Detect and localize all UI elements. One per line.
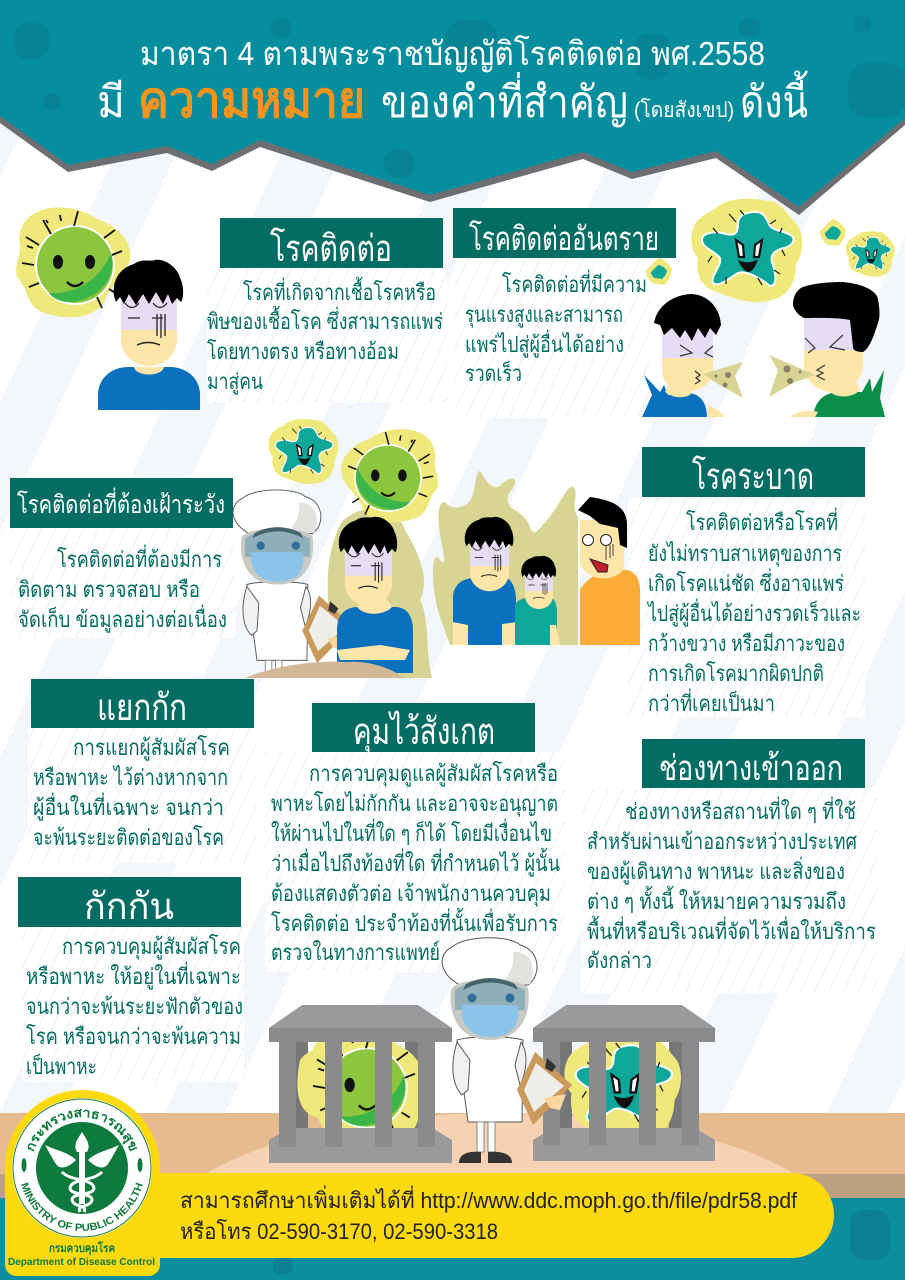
panel: กักกัน: หรือพาหะ ให้อยู่ในที่เฉพาะ [26, 961, 241, 990]
logo: Ministry of Public Health: กระทรวงสาธารณสุข [28, 1108, 138, 1152]
icon: green virus top left [16, 207, 130, 317]
panel: กักกัน: เป็นพาหะ [26, 1052, 97, 1079]
panel: โรคระบาด: ไปสู่ผู้อื่นได้อย่างรวดเร็วและ [646, 598, 861, 627]
panel: ช่องทางเข้าออก [582, 739, 877, 993]
panel: กักกัน: จนกว่าจะพ้นระยะฟักตัวของ [26, 994, 243, 1019]
icon: sad person in blue shirt [98, 260, 200, 410]
panel: โรคระบาด: โรคติดต่อหรือโรคที่ [686, 507, 838, 535]
panel: โรคติดต่อที่ต้องเฝ้าระวัง: จัดเก็บ ข้อมูลอย่างต่อเนื่อง [18, 604, 227, 633]
panel: โรคระบาด: เกิดโรคแน่ชัด ซึ่งอาจแพร่ [648, 568, 844, 596]
header banner [0, 0, 905, 215]
panel: กักกัน [18, 877, 244, 1082]
panel: คุมไว้สังเกต: ว่าเมื่อไปถึงท้องที่ใด ที่กำหนดไว้ ผู้นั้น [271, 848, 560, 877]
icon: sneezing person right [769, 282, 885, 417]
panel: โรคระบาด: การเกิดโรคมากผิดปกติ [648, 661, 824, 686]
panel: โรคติดต่ออันตราย: รุนแรงสูงและสามารถ [465, 302, 623, 328]
panel: คุมไว้สังเกต: พาหะโดยไม่กักกัน และอาจจะอนุญาต [271, 791, 558, 817]
panel: ช่องทางเข้าออก: ดังกล่าว [587, 948, 652, 973]
panel: โรคติดต่ออันตราย [453, 208, 676, 418]
icon: sick group with fumes [433, 471, 640, 645]
panel: โรคระบาด: โรคระบาด [692, 455, 814, 497]
contact bar: สามารถศึกษาเพิ่มเติมได้ที่ http://www.ddc.moph.go.th/file/pdr58.pdf [180, 1185, 798, 1213]
title: ของคำที่สำคัญ [381, 71, 628, 127]
panel: โรคระบาด [628, 447, 865, 717]
panel: โรคติดต่อที่ต้องเฝ้าระวัง [10, 478, 235, 638]
logo: Ministry of Public Health: MINISTRY OF PUBLIC HEALTH [21, 1182, 143, 1231]
panel: คุมไว้สังเกต: ตรวจในทางการแพทย์ [271, 940, 440, 965]
contact bar [120, 1173, 834, 1258]
icon: patient aura [328, 509, 432, 678]
icon: right cage with teal virus [533, 1005, 715, 1161]
icon: teal virus above patient [268, 419, 338, 484]
panel: ช่องทางเข้าออก: ช่องทางหรือสถานที่ใด ๆ ที่ใช้ [625, 796, 856, 824]
panel: โรคติดต่ออันตราย: โรคติดต่ออันตราย [469, 220, 659, 257]
logo: Ministry of Public Health: Department of Disease Control [8, 1256, 155, 1268]
title: มาตรา 4 ตามพระราชบัญญัติโรคติดต่อ พศ.2558 [140, 35, 765, 72]
icon: doctor between cages [442, 938, 572, 1163]
logo: Ministry of Public Health [5, 1090, 160, 1276]
icon: patient in bed [245, 517, 413, 678]
panel: แยกกัก: หรือพาหะ ไว้ต่างหากจาก [33, 765, 228, 790]
title: ดังนี้ [740, 70, 808, 127]
panel: กักกัน: กักกัน [84, 886, 174, 927]
logo: Ministry of Public Health: กรมควบคุมโรค [49, 1240, 115, 1256]
icon: green virus above patient [341, 429, 438, 522]
panel: โรคติดต่ออันตราย: แพร่ไปสู่ผู้อื่นได้อย่าง [465, 329, 624, 358]
icon: small blob top [820, 219, 846, 246]
icon: small teal virus right [846, 231, 895, 277]
panel: แยกกัก: ผู้อื่นในที่เฉพาะ จนกว่า [33, 792, 224, 821]
panel: โรคติดต่อ: มาสู่คน [207, 369, 263, 395]
icon: sneezing person left [642, 294, 743, 417]
panel: โรคติดต่อ: พิษของเชื้อโรค ซึ่งสามารถแพร่ [207, 306, 443, 334]
panel: คุมไว้สังเกต: ให้ผ่านไปในที่ใด ๆ ก็ได้ โดยมีเงื่อนไข [271, 818, 552, 846]
panel: แยกกัก: จะพ้นระยะติดต่อของโรค [33, 825, 224, 850]
title: ความหมาย [138, 72, 365, 128]
panel: โรคติดต่อ [207, 218, 447, 403]
panel: ช่องทางเข้าออก: ต่าง ๆ ทั้งนี้ ให้หมายความรวมถึง [587, 886, 846, 914]
panel: คุมไว้สังเกต [265, 703, 565, 972]
panel: คุมไว้สังเกต: การควบคุมดูแลผู้สัมผัสโรคหรือ [309, 761, 558, 787]
panel: คุมไว้สังเกต: โรคติดต่อ ประจำท้องที่นั้นเพื่อรับการ [271, 908, 558, 936]
panel: ช่องทางเข้าออก: ของผู้เดินทาง พาหนะ และสิ่งของ [587, 856, 845, 885]
panel: ช่องทางเข้าออก: ช่องทางเข้าออก [659, 749, 843, 788]
icon: left cage with green virus [269, 1005, 452, 1163]
icon: large teal virus [691, 199, 802, 302]
panel: แยกกัก: แยกกัก [97, 687, 187, 728]
contact bar: หรือโทร 02-590-3170, 02-590-3318 [180, 1219, 498, 1244]
panel: โรคติดต่อ: โรคติดต่อ [270, 227, 392, 269]
floor and footer band [0, 1113, 905, 1280]
icon: small blob left [646, 258, 672, 285]
panel: โรคติดต่ออันตราย: โรคติดต่อที่มีความ [502, 269, 647, 297]
icon: doctor with patient [232, 490, 341, 672]
panel: โรคติดต่อที่ต้องเฝ้าระวัง: ติดตาม ตรวจสอบ หรือ [18, 577, 200, 602]
panel: โรคระบาด: ยังไม่ทราบสาเหตุของการ [648, 541, 842, 567]
title [97, 35, 808, 128]
panel: โรคติดต่อ: โรคที่เกิดจากเชื้อโรคหรือ [243, 277, 436, 305]
panel: แยกกัก: การแยกผู้สัมผัสโรค [73, 735, 230, 761]
panel: โรคระบาด: กว่าที่เคยเป็นมา [648, 688, 775, 716]
panel: คุมไว้สังเกต: คุมไว้สังเกต [353, 710, 495, 754]
panel: โรคระบาด: กว้างขวาง หรือมีภาวะของ [648, 631, 845, 656]
title: มี [97, 78, 125, 127]
panel: คุมไว้สังเกต: ต้องแสดงตัวต่อ เจ้าพนักงานควบคุม [271, 881, 551, 907]
panel: โรคติดต่อ: โดยทางตรง หรือทางอ้อม [207, 339, 399, 364]
panel: กักกัน: โรค หรือจนกว่าจะพ้นความ [26, 1024, 241, 1049]
title: (โดยสังเขป) [634, 98, 734, 122]
panel: กักกัน: การควบคุมผู้สัมผัสโรค [62, 934, 241, 960]
panel: แยกกัก [28, 679, 256, 863]
panel: โรคติดต่อที่ต้องเฝ้าระวัง: โรคติดต่อที่ต้องมีการ [57, 544, 222, 572]
panel: โรคติดต่อที่ต้องเฝ้าระวัง: โรคติดต่อที่ต้องเฝ้าระวัง [17, 487, 225, 519]
panel: โรคติดต่ออันตราย: รวดเร็ว [465, 359, 522, 386]
